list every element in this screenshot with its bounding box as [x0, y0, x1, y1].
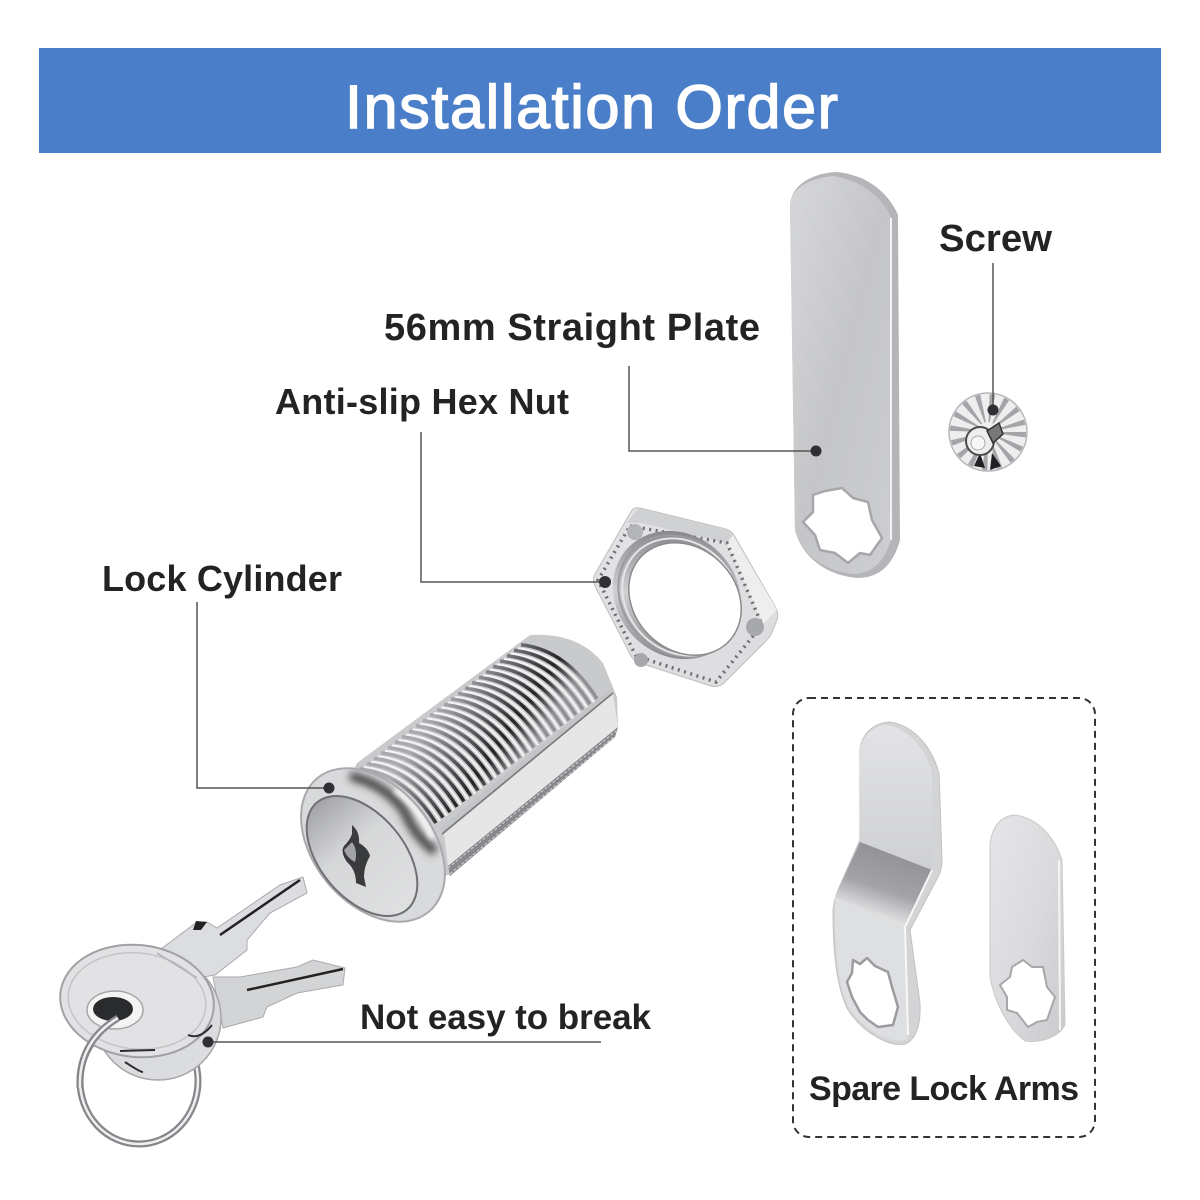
label: Not easy to break — [202, 998, 652, 1048]
label: Screw: Screw — [939, 218, 1052, 260]
icon: screw — [949, 393, 1027, 471]
label: Screw — [939, 218, 1052, 416]
icon: keys — [55, 877, 345, 1144]
label: 56mm Straight Plate — [384, 307, 822, 456]
icon: offset lock arm — [833, 722, 942, 1044]
label: Anti-slip Hex Nut — [275, 381, 611, 588]
title banner: Installation Order — [345, 73, 838, 141]
label: 56mm Straight Plate: 56mm Straight Plate — [384, 307, 760, 349]
icon: lock cylinder — [270, 635, 618, 951]
label: Not easy to break: Not easy to break — [360, 998, 652, 1037]
icon: straight lock arm — [990, 815, 1065, 1041]
label: Lock Cylinder — [102, 558, 342, 794]
label: Spare Lock Arms: Spare Lock Arms — [809, 1070, 1079, 1108]
icon: hex nut — [586, 504, 778, 687]
icon: 56mm straight plate — [790, 172, 900, 578]
panel: spare lock arms — [793, 698, 1095, 1137]
title banner — [39, 48, 1161, 153]
label: Lock Cylinder: Lock Cylinder — [102, 558, 342, 599]
label: Anti-slip Hex Nut: Anti-slip Hex Nut — [275, 381, 569, 422]
